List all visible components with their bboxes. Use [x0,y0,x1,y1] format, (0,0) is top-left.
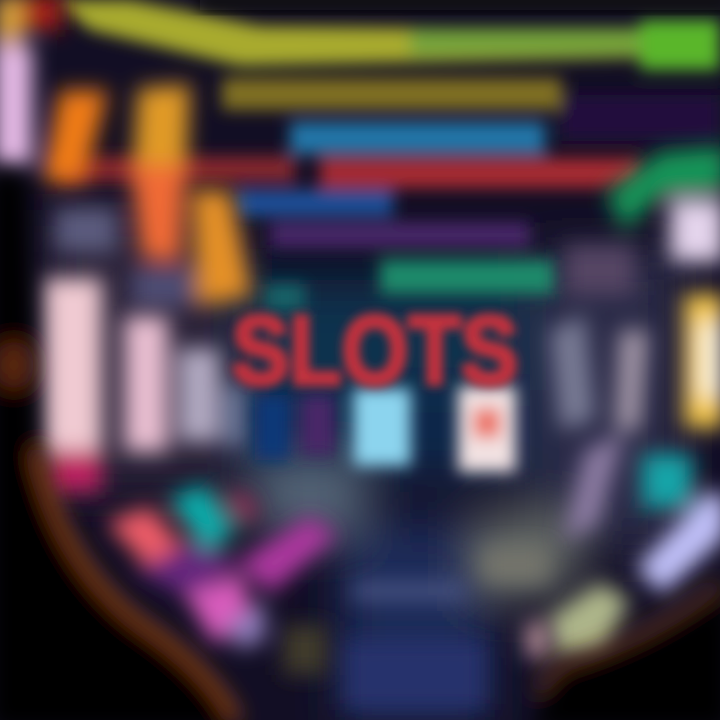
top dark edge [200,0,720,10]
background tones [50,210,680,720]
SLOTS sign: SLOTS [232,295,518,405]
left wall lamps [0,0,252,306]
left slot machines [44,278,247,492]
right side machines and signs [548,146,720,656]
floor game tables [106,484,548,710]
foreground silhouette: left [0,170,240,720]
center slot reels [255,386,516,472]
ceiling light bands [55,0,720,310]
foreground silhouette: right [530,582,720,720]
